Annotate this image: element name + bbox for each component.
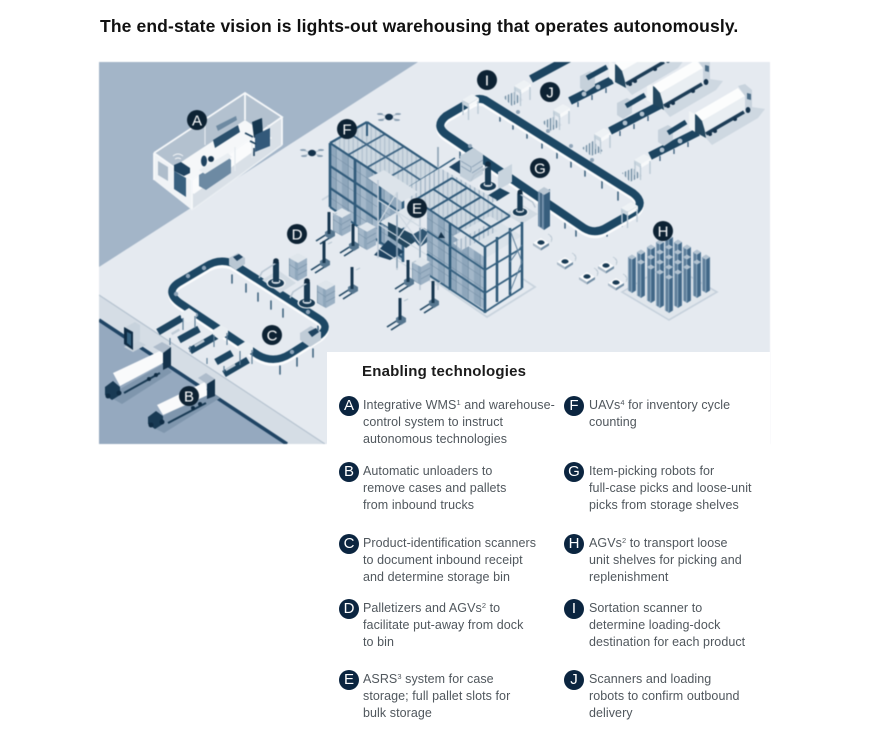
- storage rack floor outline: [322, 193, 535, 317]
- control room: [154, 93, 282, 210]
- ASRS rack: central scaffold: [368, 168, 497, 290]
- legend item F: F: [569, 397, 579, 414]
- ASRS rack: block F: [328, 120, 456, 263]
- marker A: A: [192, 112, 202, 130]
- exterior ground bottom-left: [99, 295, 325, 444]
- legend item I: determine loading-dock: [589, 618, 720, 632]
- scanners on lower loop: [229, 253, 321, 347]
- exterior ground top-left: [99, 62, 418, 267]
- legend item D: D: [344, 600, 354, 617]
- marker D: [287, 224, 307, 244]
- legend item E: ASRS3 system for case: [363, 672, 494, 686]
- legend item D: Palletizers and AGVs2 to: [363, 601, 500, 615]
- legend panel: [327, 352, 770, 730]
- legend item B: Automatic unloaders to: [363, 464, 492, 478]
- marker H: H: [658, 224, 668, 240]
- lower conveyor loop: [172, 261, 325, 374]
- legend item J: delivery: [589, 706, 633, 720]
- legend item B: remove cases and pallets: [363, 481, 506, 495]
- legend item D: [339, 599, 524, 649]
- outbound trucks: [608, 61, 764, 145]
- marker F: F: [342, 122, 352, 138]
- upper conveyor loop: [440, 99, 640, 236]
- legend item F: UAVs4 for inventory cycle: [589, 398, 730, 412]
- ASRS rack: block E: [415, 178, 522, 313]
- outbound dock lines: [462, 58, 698, 228]
- loading robots: [580, 67, 686, 146]
- truck one: [105, 342, 172, 404]
- marker G: G: [534, 160, 546, 178]
- truck two: [148, 373, 220, 433]
- legend item D: facilitate put-away from dock: [363, 618, 523, 632]
- legend item I: I: [572, 600, 576, 617]
- marker I: I: [485, 72, 489, 90]
- legend item G: Item-picking robots for: [589, 464, 714, 478]
- callout letters on the illustration: [179, 70, 673, 406]
- roller chutes: [503, 92, 642, 182]
- legend item E: storage; full pallet slots for: [363, 689, 510, 703]
- tall lift tower: [538, 187, 551, 230]
- legend item A: control system to instruct: [363, 415, 503, 429]
- marker H: [653, 221, 673, 241]
- legend item E: bulk storage: [363, 706, 432, 720]
- forklift AGVs and pallets: [311, 208, 441, 330]
- marker B: [179, 386, 199, 406]
- legend item B: from inbound trucks: [363, 498, 474, 512]
- inbound dock conveyors: [158, 308, 253, 374]
- legend item E: E: [344, 671, 354, 688]
- legend item H: H: [569, 535, 579, 552]
- legend item H: [564, 534, 742, 584]
- legend item A: Integrative WMS1 and warehouse-: [363, 398, 555, 412]
- marker G: [530, 158, 550, 178]
- marker A: [187, 110, 207, 130]
- legend item J: robots to confirm outbound: [589, 689, 740, 703]
- AGV fleet: [533, 234, 627, 290]
- title: The end-state vision is lights-out warehousing that operates autonomously.: [100, 16, 738, 36]
- AGV shelf grid H: [622, 234, 717, 320]
- legend item C: and determine storage bin: [363, 570, 510, 584]
- legend item D: to bin: [363, 635, 394, 649]
- legend item A: [339, 396, 555, 446]
- warehouse floor: [99, 62, 770, 444]
- legend item G: picks from storage shelves: [589, 498, 739, 512]
- legend item J: J: [570, 671, 578, 688]
- legend item G: full-case picks and loose-unit: [589, 481, 752, 495]
- legend item B: B: [344, 463, 354, 480]
- legend item H: unit shelves for picking and: [589, 553, 742, 567]
- legend item C: C: [344, 535, 354, 552]
- loading apron band: [99, 295, 325, 444]
- marker C: [262, 325, 282, 345]
- legend item C: Product-identification scanners: [363, 536, 536, 550]
- legend item H: AGVs2 to transport loose: [589, 536, 728, 550]
- marker E: E: [412, 200, 422, 218]
- illustration: autonomous warehouse: [98, 61, 770, 445]
- legend item G: G: [568, 463, 580, 480]
- legend item B: [339, 462, 506, 512]
- dark conveyors: [531, 58, 698, 156]
- legend item I: [564, 599, 745, 649]
- marker B: B: [184, 388, 194, 406]
- legend item A: A: [344, 397, 354, 414]
- marker I: [477, 70, 497, 90]
- legend item F: counting: [589, 415, 637, 429]
- marker J: J: [546, 84, 554, 102]
- marker F: [337, 119, 357, 139]
- marker E: [407, 198, 427, 218]
- legend item E: [339, 670, 510, 720]
- legend item G: [564, 462, 752, 512]
- marker C: C: [267, 328, 278, 344]
- legend item I: destination for each product: [589, 635, 745, 649]
- legend item J: Scanners and loading: [589, 672, 711, 686]
- legend heading: Enabling technologies: [362, 363, 526, 380]
- legend item A: autonomous technologies: [363, 432, 507, 446]
- drones: [300, 113, 401, 157]
- legend item F: [564, 396, 730, 429]
- kiosk: [124, 322, 146, 352]
- legend item C: [339, 534, 536, 584]
- inbound trucks: [105, 342, 220, 433]
- marker J: [540, 82, 560, 102]
- marker D: D: [292, 226, 303, 244]
- item-picking area: [438, 147, 551, 230]
- legend item J: [564, 670, 740, 720]
- legend item C: to document inbound receipt: [363, 553, 523, 567]
- legend item I: Sortation scanner to: [589, 601, 702, 615]
- legend item H: replenishment: [589, 570, 668, 584]
- palletizing robots and pallets: [259, 253, 335, 308]
